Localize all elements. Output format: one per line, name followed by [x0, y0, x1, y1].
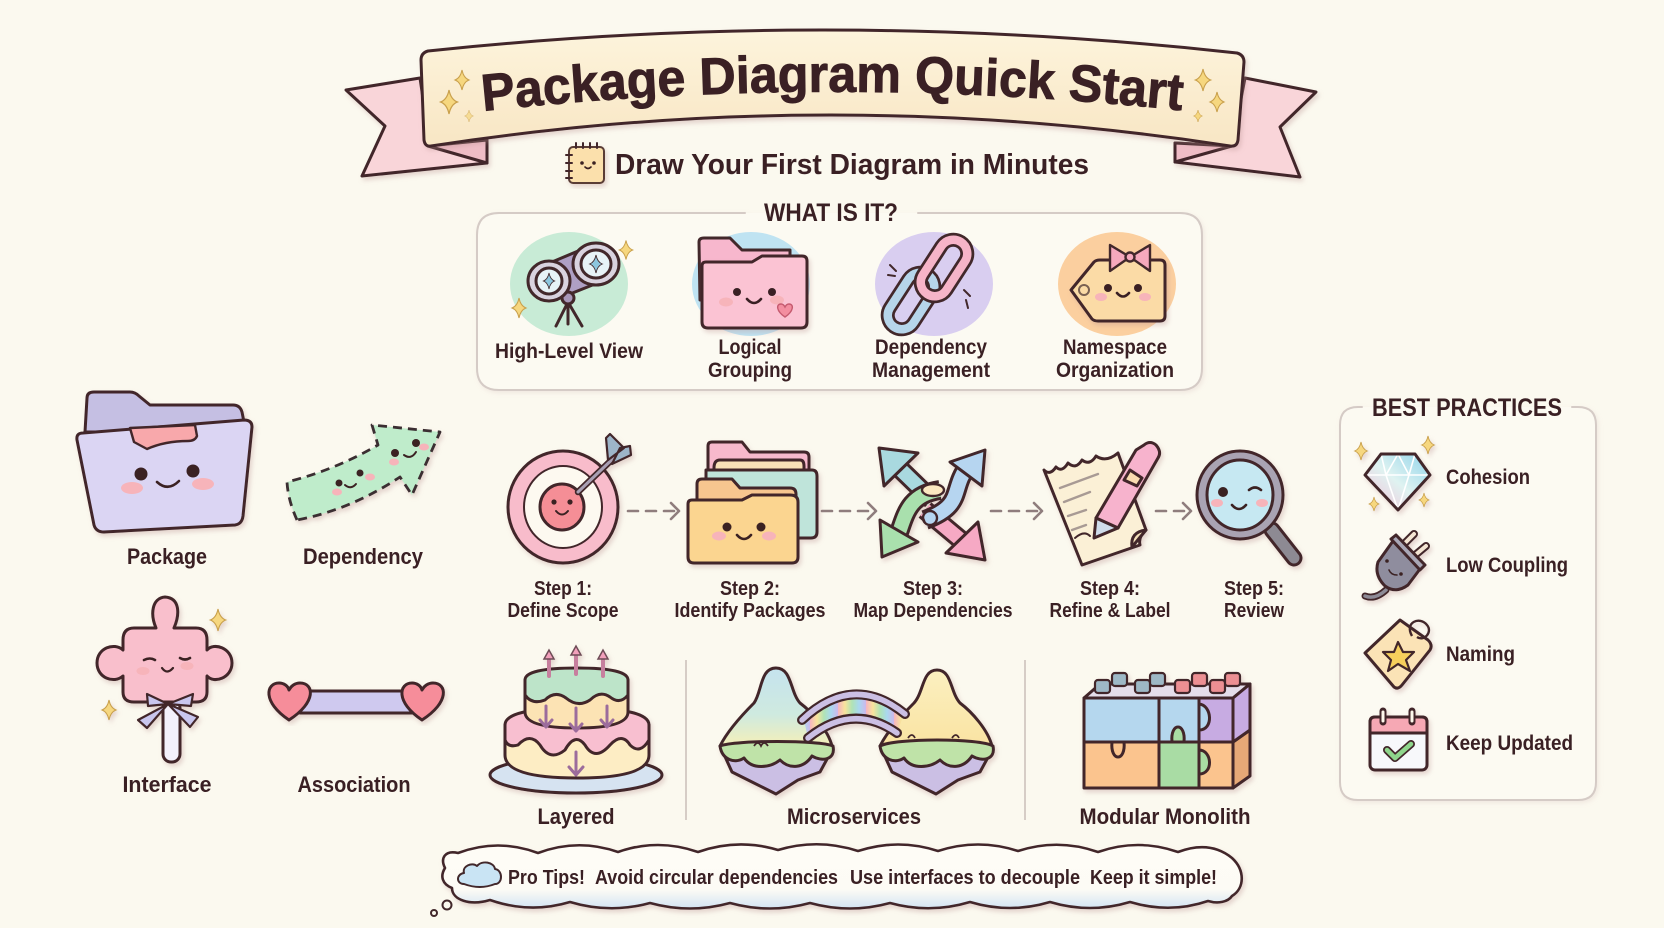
tips text: Keep it simple!: [1090, 867, 1217, 889]
icon: target with arrow: [508, 434, 631, 563]
icon: plug: [1365, 534, 1426, 597]
label: Dependency: [875, 336, 987, 359]
arrow: step 4 to 5: [1156, 510, 1189, 512]
item: dependency management: [872, 232, 993, 382]
icon: notepad: [566, 143, 604, 183]
item: logical grouping: Grouping: [708, 359, 792, 382]
step 4: [1044, 442, 1170, 622]
item: keep updated: [1370, 711, 1573, 770]
icon: lavender folder: [77, 392, 252, 532]
steps flow: [508, 434, 1294, 622]
label: Dependency: [303, 544, 424, 569]
banner body: [421, 30, 1244, 146]
title text: Package Diagram Quick Start: [482, 54, 1184, 112]
tips text: Pro Tips!: [508, 867, 585, 889]
ribbon tail right: [1175, 78, 1316, 177]
icon: star tag: [1365, 620, 1431, 688]
subtitle text: Draw Your First Diagram in Minutes: [615, 149, 1089, 181]
item: cohesion: [1355, 436, 1530, 511]
thought bubbles: [431, 900, 452, 916]
step 1: Define Scope: [508, 600, 618, 622]
ribbon tail left: [346, 78, 487, 176]
sparkles right: [1194, 69, 1224, 122]
heading: BEST PRACTICES: [1372, 394, 1562, 422]
label: Layered: [538, 804, 614, 829]
icon: tag with bow: [1058, 232, 1176, 336]
icon: magnifier: [1197, 451, 1294, 558]
label: Step 4:: [1080, 578, 1140, 600]
panel frame: [477, 213, 1202, 390]
arrow: step 2 to 3: [822, 510, 874, 512]
item: dependency management: Management: [872, 359, 990, 382]
style: modular monolith: [1080, 673, 1250, 829]
legend: interface: [97, 597, 232, 797]
label: Low Coupling: [1446, 554, 1568, 577]
item: naming: [1365, 620, 1515, 688]
icon: crossing arrows: [879, 448, 985, 560]
label: Naming: [1446, 643, 1515, 666]
icon: telescope: [510, 232, 633, 336]
icon: calendar: [1370, 711, 1427, 770]
icon: stack of folders: [688, 442, 817, 563]
icon: dashed arrow: [287, 425, 440, 520]
divider left: [685, 660, 687, 820]
icon: chain links: [875, 232, 993, 336]
label: Step 3:: [903, 578, 963, 600]
step 5: [1197, 451, 1294, 622]
heading: WHAT IS IT?: [764, 199, 898, 227]
step 4: Refine & Label: [1050, 600, 1170, 622]
icon: thought cloud: [458, 862, 501, 887]
tips text: Use interfaces to decouple: [850, 867, 1080, 889]
arrowhead: [671, 503, 679, 519]
arrowhead: [1183, 503, 1191, 519]
step 2: [674, 442, 826, 622]
icon: puzzle lollipop: [97, 597, 232, 762]
legend: dependency: [287, 425, 440, 569]
label: Step 5:: [1224, 578, 1284, 600]
panel: best practices: [1340, 394, 1596, 800]
icon: floating islands and rainbow bridge: [720, 668, 993, 794]
tips text: Avoid circular dependencies: [595, 867, 838, 889]
arrowhead: [868, 503, 876, 519]
label: Step 2:: [720, 578, 780, 600]
icon: pink folder: [692, 232, 810, 336]
legend: package: [77, 392, 252, 569]
icon: puzzle blocks: [1084, 673, 1250, 788]
item: low coupling: [1365, 534, 1568, 597]
label: Logical: [718, 336, 782, 359]
step 3: Map Dependencies: [854, 600, 1012, 622]
panel: what is it: [477, 199, 1202, 390]
style: microservices: [720, 668, 993, 829]
label: Microservices: [787, 804, 921, 829]
icon: two hearts with bar: [269, 683, 443, 720]
divider right: [1024, 660, 1026, 820]
label: Interface: [122, 772, 212, 797]
sparkles left: [441, 70, 473, 122]
panel frame: [1340, 407, 1596, 800]
arrow: step 1 to 2: [628, 510, 676, 512]
arrowhead: [1034, 503, 1042, 519]
item: namespace organization: [1056, 232, 1176, 382]
architecture styles: [490, 646, 1250, 829]
callout: pro tips: [431, 844, 1242, 916]
step 3: [854, 448, 1012, 622]
label: Package: [127, 544, 207, 569]
label: Step 1:: [534, 578, 592, 600]
cloud shape: [442, 844, 1242, 908]
label: Cohesion: [1446, 466, 1530, 489]
label: Association: [298, 772, 410, 797]
label: Namespace: [1063, 336, 1167, 359]
tips text: [508, 867, 1217, 889]
icon: note and pen: [1044, 442, 1160, 565]
label: Keep Updated: [1446, 732, 1573, 755]
subtitle: [566, 143, 1089, 183]
icon: cake: [490, 646, 662, 793]
icon: diamond: [1355, 436, 1434, 511]
label: High-Level View: [495, 340, 644, 363]
item: high-level view: [495, 232, 644, 363]
arrow: step 3 to 4: [991, 510, 1040, 512]
step 2: Identify Packages: [674, 600, 826, 622]
style: layered: [490, 646, 662, 829]
step 1: [508, 434, 631, 622]
title banner: [344, 28, 1320, 183]
item: namespace organization: Organization: [1056, 359, 1174, 382]
legend: association: [269, 683, 443, 797]
label: Modular Monolith: [1080, 804, 1250, 829]
item: logical grouping: [692, 232, 810, 382]
step 5: Review: [1224, 600, 1284, 622]
